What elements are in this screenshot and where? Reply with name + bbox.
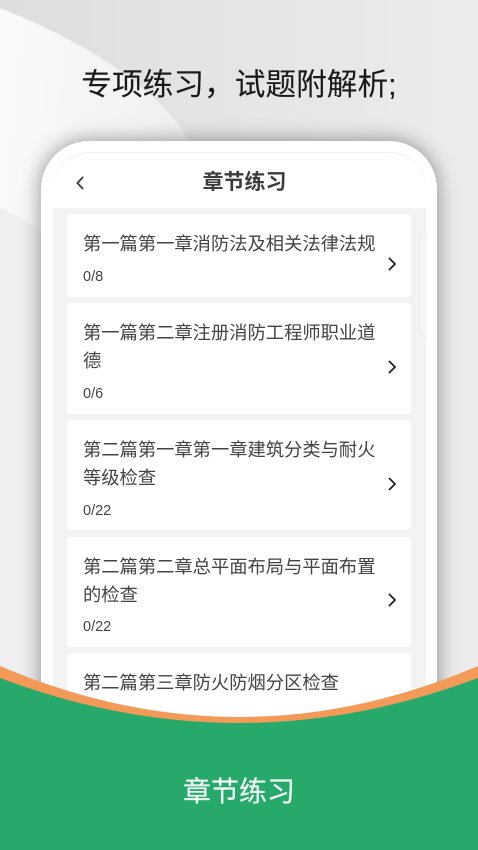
card 5: 第二篇第三章防火防烟分区检查: [83, 672, 339, 693]
phone screen: [53, 152, 426, 741]
card 4: 的检查: [83, 584, 138, 605]
phone mockup: [41, 141, 437, 741]
card 4: 第二篇第二章总平面布局与平面布置: [83, 556, 376, 577]
card 2: 第一篇第二章注册消防工程师职业道: [83, 322, 376, 343]
card 5: [67, 653, 411, 743]
card 2: 德: [83, 350, 101, 371]
card 1: 0/8: [83, 269, 103, 285]
banner label: 章节练习: [183, 776, 295, 807]
header title: 章节练习: [202, 171, 286, 194]
card 3: 第二篇第一章第一章建筑分类与耐火: [83, 439, 376, 460]
app header: [53, 153, 426, 208]
card 3: 等级检查: [83, 467, 156, 488]
card 3: 0/22: [83, 503, 111, 519]
card 1: 第一篇第一章消防法及相关法律法规: [83, 233, 376, 254]
card 4: [67, 537, 411, 647]
back chevron icon: [76, 176, 84, 190]
card 2: [67, 303, 411, 414]
card 4: 0/22: [83, 619, 111, 635]
card 2: 0/6: [83, 386, 103, 402]
card 1: [67, 214, 411, 297]
title: 专项练习，试题附解析;: [81, 67, 397, 102]
card 3: [67, 420, 411, 530]
side button outline: [419, 235, 427, 337]
bottom banner curve: [0, 666, 478, 850]
